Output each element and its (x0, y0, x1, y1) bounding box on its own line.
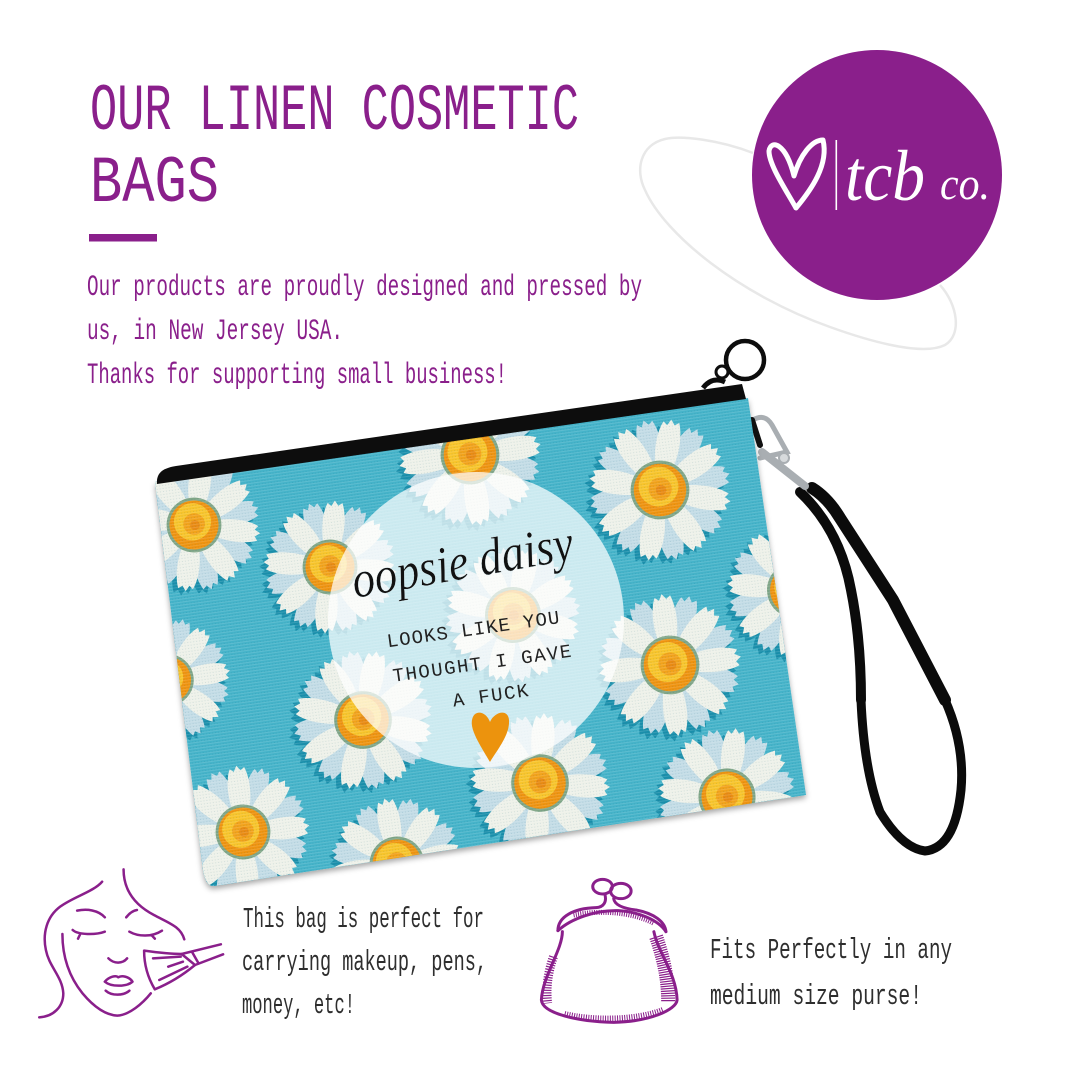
wrist strap (800, 488, 962, 851)
logo wordmark (845, 136, 990, 216)
title (90, 74, 579, 221)
logo wordmark: tcb (845, 136, 925, 216)
typewriter phrase: THOUGHT I GAVE (391, 641, 573, 688)
bag body (155, 398, 806, 886)
cosmetic bag (152, 384, 809, 892)
feature text: purse: Fits Perfectly in any (710, 934, 952, 967)
title: OUR LINEN COSMETIC (90, 74, 579, 149)
decorative orbit outline (640, 138, 956, 349)
script phrase: oopsie daisy (347, 515, 578, 610)
intro text: Thanks for supporting small business! (87, 359, 507, 393)
feature text: makeup: carrying makeup, pens, (242, 946, 487, 979)
typewriter phrase (386, 606, 577, 721)
feature text: makeup: This bag is perfect for (243, 903, 484, 936)
logo divider (836, 140, 837, 210)
logo badge (752, 50, 1002, 300)
intro text: Our products are proudly designed and pressed by (87, 271, 642, 305)
title: BAGS (90, 146, 219, 221)
icon: coin purse (541, 879, 677, 1022)
intro text (87, 271, 642, 393)
typewriter phrase: A FUCK (451, 680, 530, 713)
feature text: purse: medium size purse! (710, 980, 922, 1013)
typewriter phrase: LOOKS LIKE YOU (386, 607, 561, 653)
translucent label circle (328, 472, 624, 768)
icon: face with makeup brush (39, 869, 223, 1017)
title underline (89, 234, 157, 242)
feature text: makeup (242, 903, 487, 1022)
zipper ring (703, 341, 764, 388)
orange heart (472, 713, 509, 762)
feature text: makeup: money, etc! (242, 989, 355, 1022)
zipper (157, 384, 746, 484)
metal clasp (752, 417, 805, 486)
daisy pattern (94, 374, 870, 947)
logo heart (769, 140, 824, 208)
feature text: purse (710, 934, 952, 1013)
logo wordmark: co. (940, 158, 990, 209)
intro text: us, in New Jersey USA. (87, 315, 343, 349)
